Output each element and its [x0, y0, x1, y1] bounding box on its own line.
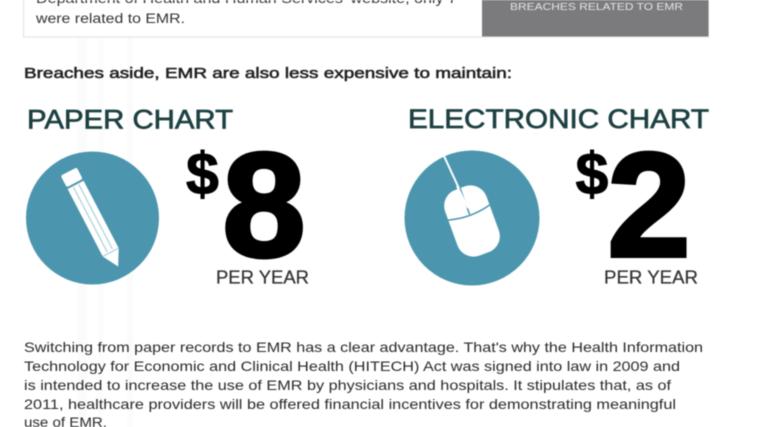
text block: HITECH explanation: Technology for Economic and Clinical Health (HITECH) Act was signed into law in 2009 and [24, 358, 680, 374]
panel: electronic chart [404, 104, 709, 288]
text: breaches description [35, 0, 457, 26]
price: eight dollars: $ [186, 141, 219, 207]
heading: cost comparison intro: Breaches aside, EMR are also less expensive to maintain: [24, 65, 512, 82]
panel: grey breaches label: BREACHES RELATED TO EMR [510, 1, 683, 13]
icon: pencil in circle [26, 152, 159, 284]
icon: mouse in circle [404, 150, 540, 286]
price: eight dollars: 8 [222, 123, 306, 288]
text: breaches description: were related to EMR. [35, 11, 185, 26]
price: eight dollars [186, 123, 306, 288]
price: two dollars: 2 [608, 123, 690, 288]
label: per year: PER YEAR [216, 268, 309, 288]
heading: paper chart: PAPER CHART [27, 104, 233, 134]
price: two dollars: $ [576, 141, 608, 207]
label: per year: PER YEAR [604, 268, 698, 288]
text block: HITECH explanation: 2011, healthcare providers will be offered financial incentives for demonstrating meaningful [24, 396, 676, 412]
text block: HITECH explanation: is intended to increase the use of EMR by physicians and hospitals. It stipulates that, as of [24, 377, 671, 393]
text block: HITECH explanation: Switching from paper records to EMR has a clear advantage. That's why the Health Information [24, 339, 703, 355]
panel: grey breaches label [482, 0, 708, 36]
panel: EMR breaches callout [24, 0, 708, 37]
panel: paper chart [26, 104, 309, 288]
heading: electronic chart: ELECTRONIC CHART [408, 104, 709, 134]
text block: HITECH explanation [24, 339, 703, 427]
